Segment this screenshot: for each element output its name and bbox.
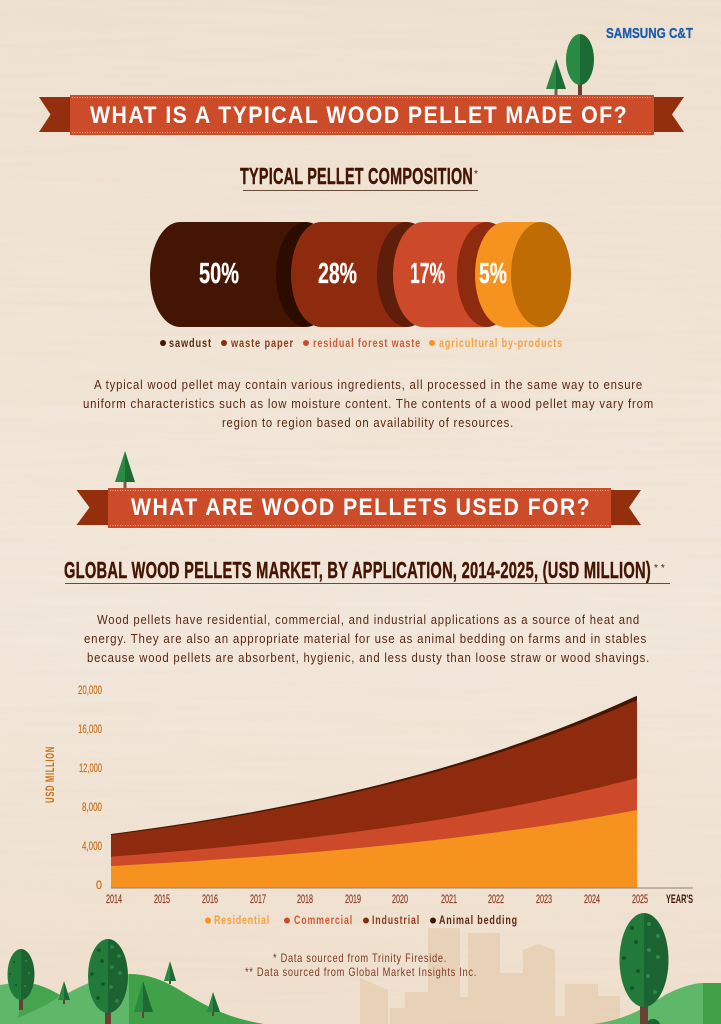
area: commercial [111,778,637,888]
percentage labels: 28% [318,258,357,290]
x axis labels: 2017 [250,892,266,906]
x axis labels: 2021 [441,892,457,906]
legend: market applications: Animal bedding [439,915,518,927]
icon: tree on second banner [115,451,135,488]
percentage labels [199,258,507,290]
small pine trees [58,961,220,1018]
icon: trees on first banner [546,34,594,95]
paragraph: pellet ingredients: region to region based on availability of resources. [222,415,514,430]
legend: market applications: Commercial [294,915,353,927]
tree: large right [620,913,668,1024]
heading: typical pellet composition: * [474,169,478,180]
paragraph: pellet applications: because wood pellets are absorbent, hygienic, and less dusty than loose straw or wood shavings. [87,650,650,665]
city silhouette [360,928,620,1024]
hill: right [593,983,721,1024]
heading: typical pellet composition [240,163,478,190]
x axis labels: 2023 [536,892,552,906]
x axis labels: 2022 [488,892,504,906]
legend: pellet composition: sawdust [169,338,212,350]
footnotes: data sources [245,951,477,979]
y axis labels: 8,000 [82,800,102,814]
x axis labels: 2019 [345,892,361,906]
y axis labels: 12,000 [79,761,102,775]
legend: market applications [205,915,518,927]
footnotes: data sources: ** Data sourced from Global Market Insights Inc. [245,965,477,979]
x axis labels: 2020 [392,892,408,906]
x axis labels [106,892,648,906]
y axis labels: 20,000 [78,683,102,697]
legend: pellet composition: waste paper [230,338,294,350]
x axis title: YEAR'S [666,892,693,906]
x axis labels: 2015 [154,892,170,906]
logo: Samsung C&T: SAMSUNG C&T [606,25,693,42]
percentage labels: 17% [410,258,445,290]
banner: what is a typical wood pellet made of: WHAT IS A TYPICAL WOOD PELLET MADE OF? [90,102,628,129]
y axis labels: 4,000 [82,839,102,853]
y axis title: USD MILLION [43,746,57,803]
segment: sawdust 50% [150,222,336,327]
area: residential [111,810,637,888]
heading: global wood pellets market: ** [654,563,668,574]
y axis labels [78,683,102,892]
paragraph: pellet ingredients [83,377,654,430]
paragraph: pellet applications: energy. They are also an appropriate material for use as animal bedding on farms and in stables [84,631,647,646]
banner: what are wood pellets used for [76,488,641,528]
paragraph: pellet applications [84,612,650,665]
area: industrial [111,700,637,888]
banner: what are wood pellets used for: WHAT ARE WOOD PELLETS USED FOR? [131,494,591,521]
chart: stacked pellet cylinders [150,222,571,327]
legend: market applications: Residential [214,915,270,927]
y axis labels: 0 [96,878,102,892]
legend: pellet composition: residual forest waste [313,338,421,350]
chart: market area chart [43,683,693,906]
segment: waste paper 28% [291,222,437,327]
percentage labels: 50% [199,258,239,290]
banner: what is a typical wood pellet made of [39,95,684,135]
legend: market applications: Industrial [372,915,420,927]
x axis labels: 2024 [584,892,600,906]
legend: pellet composition: agricultural by-products [439,338,563,350]
percentage labels: 5% [479,258,507,290]
x axis labels: 2016 [202,892,218,906]
x axis labels: 2025 [632,892,648,906]
area: animal bedding [111,696,637,888]
footnotes: data sources: * Data sourced from Trinity Fireside. [273,951,447,965]
paragraph: pellet ingredients: uniform characteristics such as low moisture content. The contents of a wood pellet may vary from [83,396,654,411]
x axis labels: 2014 [106,892,122,906]
x axis line [111,887,693,889]
paragraph: pellet applications: Wood pellets have residential, commercial, and industrial applications as a source of heat and [97,612,640,627]
segment: residual forest waste 17% [393,222,517,327]
tree: large left [88,939,128,1024]
y axis labels: 16,000 [78,722,102,736]
tree: far left [8,949,35,1010]
paragraph: pellet ingredients: A typical wood pellet may contain various ingredients, all processed in the same way to ensure [94,377,643,392]
heading: typical pellet composition: TYPICAL PELLET COMPOSITION [240,163,473,189]
segment: agricultural by-products 5% [475,222,571,327]
x axis labels: 2018 [297,892,313,906]
hills: left [0,974,264,1024]
legend: pellet composition [160,338,563,350]
